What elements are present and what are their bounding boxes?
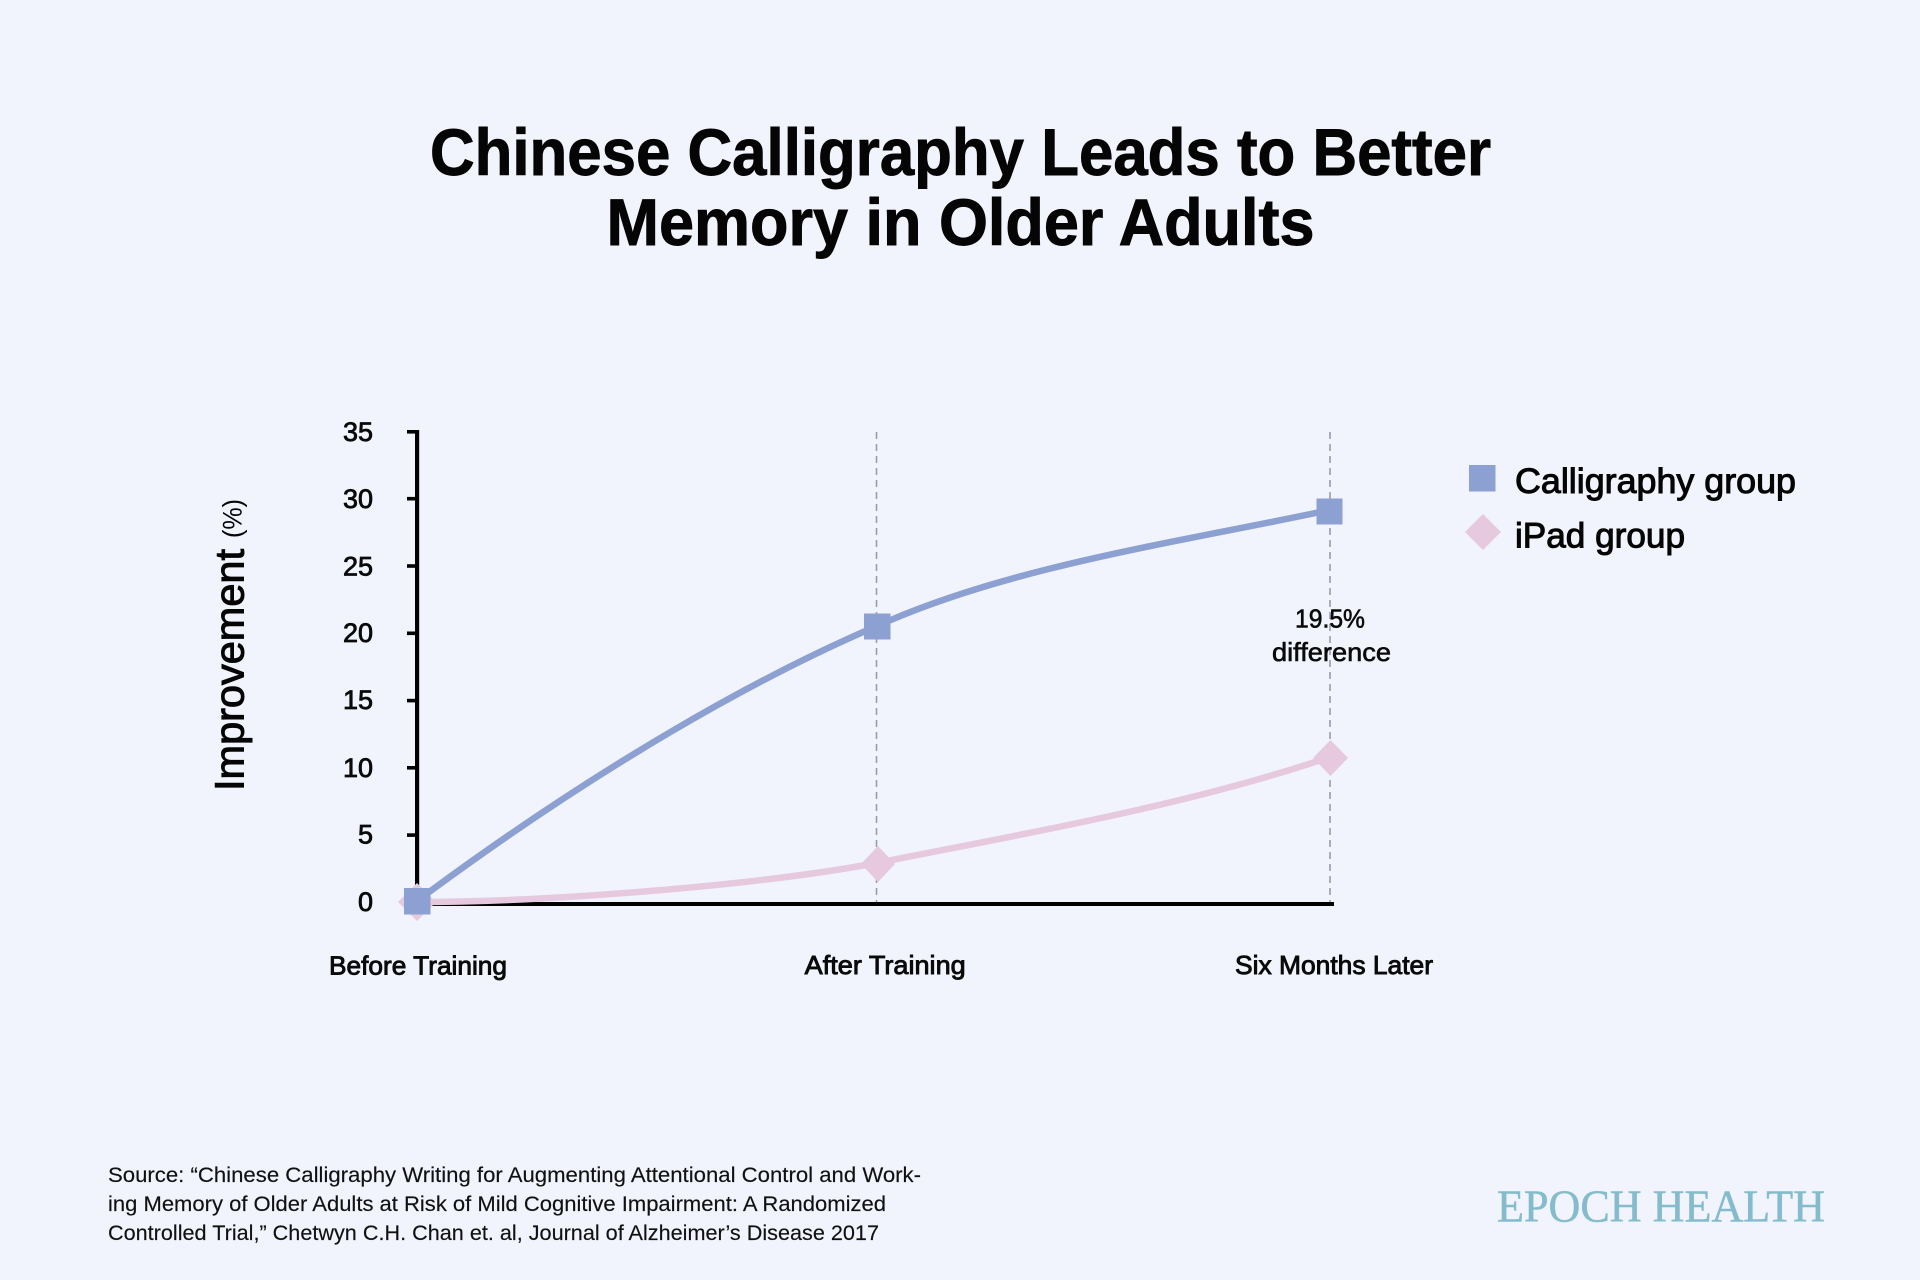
line chart: [207, 417, 1433, 980]
title: Memory in Older Adults: [606, 185, 1314, 259]
difference callout: [1272, 604, 1391, 667]
legend: [1465, 462, 1796, 556]
source note: Source: “Chinese Calligraphy Writing for Augmenting Attentional Control and Work-: [108, 1163, 921, 1187]
y axis tick labels: 20: [343, 618, 373, 648]
legend: calligraphy group: Calligraphy group: [1515, 462, 1796, 501]
title: Chinese Calligraphy Leads to Better: [430, 115, 1491, 189]
calligraphy group line: [417, 510, 1330, 901]
y axis tick labels: 30: [343, 484, 373, 514]
y axis title: (%): [218, 499, 248, 538]
x axis labels: [329, 950, 1433, 980]
y axis tick labels: 0: [358, 887, 373, 917]
y axis tick labels: 5: [358, 820, 373, 850]
y axis tick labels: 15: [343, 685, 373, 715]
x axis labels: Before Training: [329, 950, 507, 980]
x axis labels: Six Months Later: [1235, 950, 1433, 980]
difference callout: 19.5%: [1295, 604, 1365, 634]
legend: iPad group: iPad group: [1515, 516, 1685, 556]
source note: ing Memory of Older Adults at Risk of Mild Cognitive Impairment: A Randomized: [108, 1192, 886, 1216]
iPad group markers: [398, 740, 1348, 921]
logo: Epoch Health: EPOCH HEALTH: [1497, 1182, 1825, 1232]
y axis title: Improvement: [207, 548, 253, 791]
x axis: [415, 902, 1334, 906]
y axis tick labels: 35: [343, 417, 373, 447]
y axis tick labels: 10: [343, 753, 373, 783]
y axis tick labels: [343, 417, 373, 917]
title: [430, 115, 1491, 259]
dashed guide lines: [876, 432, 1330, 906]
iPad group line: [417, 757, 1330, 902]
y axis with ticks: [407, 430, 419, 905]
source note: [108, 1163, 921, 1245]
source note: Controlled Trial,” Chetwyn C.H. Chan et. al, Journal of Alzheimer’s Disease 2017: [108, 1221, 879, 1245]
x axis labels: After Training: [805, 950, 966, 980]
y axis tick labels: 25: [343, 552, 373, 582]
calligraphy group markers: [404, 498, 1342, 914]
difference callout: difference: [1272, 637, 1391, 667]
